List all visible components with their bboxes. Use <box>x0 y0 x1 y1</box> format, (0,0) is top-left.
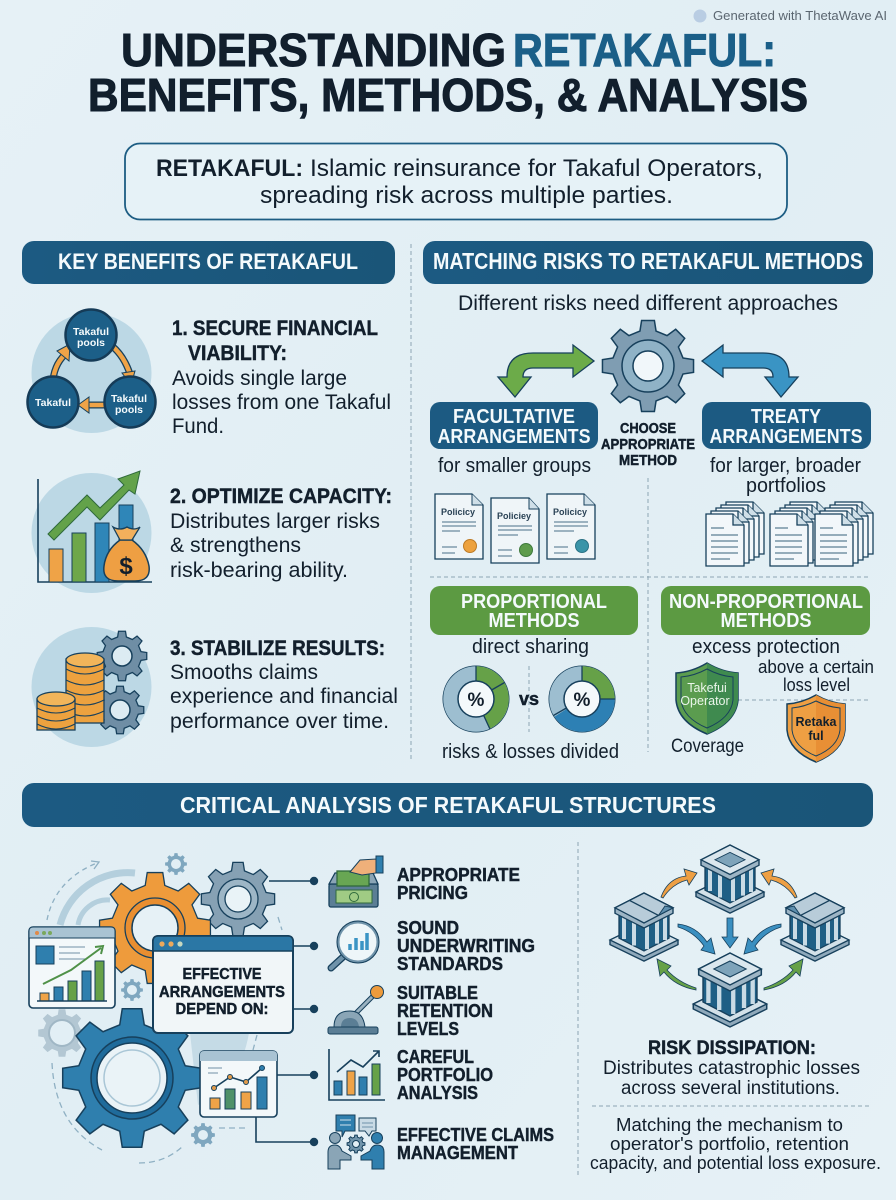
icon: gray gear <box>201 862 275 936</box>
icon: takaful operator shield: Operator <box>680 694 730 708</box>
heading: critical analysis <box>22 783 873 827</box>
label: choose method: CHOOSE <box>620 421 676 437</box>
illustration: gears and dashboards <box>29 853 318 1163</box>
chart: donut one <box>442 666 510 732</box>
arrow: to treaty <box>702 345 798 397</box>
title: UNDERSTANDING <box>121 24 506 76</box>
icon: growth chart with money bag <box>32 471 152 593</box>
connectors <box>256 877 318 1146</box>
icon: takaful pools cycle: Takaful <box>73 326 109 338</box>
text: risk dissipation <box>603 1038 860 1099</box>
text: appropriate pricing: PRICING <box>397 883 468 903</box>
pill: treaty: TREATY <box>751 406 822 428</box>
icon: takaful pools cycle: pools <box>115 404 143 416</box>
text: benefit 1: VIABILITY: <box>188 342 287 365</box>
text: benefit 1: Fund. <box>172 415 224 438</box>
pill: proportional: PROPORTIONAL <box>461 591 607 613</box>
text: treaty note: for larger, broader <box>710 455 861 477</box>
text: careful portfolio analysis: PORTFOLIO <box>397 1065 493 1085</box>
text: coverage: Coverage <box>671 736 744 757</box>
pill: facultative <box>430 402 598 449</box>
text: benefit 2 <box>170 485 392 582</box>
text: matching the mechanism: Matching the mechanism to <box>616 1115 843 1135</box>
icon: retakaful shield: ful <box>808 729 824 743</box>
text: facultative note: for smaller groups <box>438 455 591 477</box>
text: above a certain loss level <box>758 656 874 695</box>
window: effective arrangements: EFFECTIVE <box>182 966 262 983</box>
icon: takaful pools cycle <box>28 310 156 433</box>
text: sound underwriting standards: UNDERWRITING <box>397 936 535 956</box>
title: RETAKAFUL: <box>513 24 776 76</box>
text: appropriate pricing: APPROPRIATE <box>397 865 520 885</box>
heading: matching risks <box>423 241 873 284</box>
text: benefit 3: performance over time. <box>170 710 389 733</box>
label: choose method: APPROPRIATE <box>601 437 695 453</box>
text: risks and losses divided: risks & losses divided <box>442 741 619 763</box>
text: suitable retention levels: SUITABLE <box>397 983 478 1003</box>
text: risk dissipation: Distributes catastrophic losses <box>603 1058 860 1079</box>
title <box>88 24 808 121</box>
diagram: risk dissipation network <box>610 845 849 1027</box>
text: benefit 2: risk-bearing ability. <box>170 559 348 582</box>
icon: retakaful shield <box>787 695 845 762</box>
text: sound underwriting standards: STANDARDS <box>397 954 503 974</box>
arrows: orange <box>661 869 797 898</box>
arrows: blue <box>678 918 781 954</box>
text: excess protection: excess protection <box>692 636 840 658</box>
pill: non-proportional: NON-PROPORTIONAL <box>669 591 863 613</box>
pill: non-proportional: METHODS <box>720 610 812 632</box>
text: suitable retention levels: RETENTION <box>397 1001 493 1021</box>
icon: selection gear <box>602 320 694 412</box>
icon: large blue gear <box>63 1009 201 1147</box>
icon: policy documents: Policicy <box>553 507 587 517</box>
callout: definition: Islamic reinsurance for Takaful Operators, <box>310 155 763 182</box>
chart: donut two <box>548 666 616 732</box>
icon: claims team <box>328 1115 384 1169</box>
text: benefit 1: 1. SECURE FINANCIAL <box>172 317 378 340</box>
text: benefit 3: experience and financial <box>170 685 398 708</box>
icon: portfolio chart <box>329 1049 385 1100</box>
text: benefit 3: Smooths claims <box>170 661 318 684</box>
text: risk dissipation: RISK DISSIPATION: <box>648 1038 816 1059</box>
text: effective claims management: EFFECTIVE CLAIMS <box>397 1125 554 1145</box>
text: suitable retention levels <box>397 983 493 1039</box>
text: treaty note: portfolios <box>746 475 826 497</box>
pill: proportional <box>430 586 638 635</box>
callout: definition: spreading risk across multiple parties. <box>260 182 673 209</box>
text: effective claims management <box>397 1125 554 1163</box>
text: sound underwriting standards <box>397 918 535 974</box>
text: benefit 2: & strengthens <box>170 534 301 557</box>
window: effective arrangements: ARRANGEMENTS <box>159 984 285 1001</box>
arrow: to facultative <box>498 345 594 397</box>
text: benefit 2: Distributes larger risks <box>170 510 380 533</box>
icon: magnifier <box>331 921 379 968</box>
title: BENEFITS, METHODS, & ANALYSIS <box>88 69 808 121</box>
text: above a certain loss level: above a certain <box>758 656 874 677</box>
text: subtitle: Different risks need different approaches <box>458 291 838 315</box>
icon: takaful operator shield <box>676 663 738 734</box>
pill: non-proportional <box>661 586 870 635</box>
pill: facultative: ARRANGEMENTS <box>438 426 590 448</box>
text: benefit 2: 2. OPTIMIZE CAPACITY: <box>170 485 392 508</box>
pill: treaty: ARRANGEMENTS <box>710 426 862 448</box>
icon: institutions <box>610 845 849 1027</box>
watermark: Generated with ThetaWave AI <box>713 9 887 23</box>
icon: takaful pools cycle: pools <box>77 337 105 349</box>
window: effective arrangements <box>153 936 293 1033</box>
window: left chart <box>29 927 115 1008</box>
text: above a certain loss level: loss level <box>783 674 850 695</box>
text: benefit 1 <box>172 317 391 438</box>
text: matching the mechanism <box>590 1115 881 1173</box>
text: benefit 3 <box>170 637 398 733</box>
chart: donut one: % <box>468 690 485 711</box>
pill: treaty <box>702 402 871 449</box>
text: matching the mechanism: capacity, and potential loss exposure. <box>590 1153 881 1173</box>
panel: key benefits <box>28 310 398 747</box>
text: direct sharing: direct sharing <box>472 636 589 658</box>
heading: key benefits <box>22 241 395 284</box>
icon: policy documents <box>435 494 595 563</box>
icon: growth chart with money bag: $ <box>119 553 133 580</box>
icon: policy documents: Policiey <box>497 511 531 521</box>
heading: critical analysis: CRITICAL ANALYSIS OF RETAKAFUL STRUCTURES <box>180 792 716 818</box>
text: treaty note <box>710 455 861 497</box>
text: sound underwriting standards: SOUND <box>397 918 459 938</box>
icon: takaful pools cycle: Takaful <box>111 393 147 405</box>
icon: coins and gears <box>32 627 152 747</box>
icon: takaful pools cycle: Takaful <box>35 397 71 409</box>
text: careful portfolio analysis <box>397 1047 493 1103</box>
icon: small gears <box>38 853 215 1147</box>
text: benefit 1: losses from one Takaful <box>172 391 391 414</box>
text: benefit 3: 3. STABILIZE RESULTS: <box>170 637 385 660</box>
arrows: green <box>657 959 803 990</box>
icon: orange gear <box>100 873 210 983</box>
callout: definition: RETAKAFUL: <box>156 155 303 182</box>
heading: key benefits: KEY BENEFITS OF RETAKAFUL <box>58 249 358 274</box>
text: effective claims management: MANAGEMENT <box>397 1143 518 1163</box>
pill: facultative: FACULTATIVE <box>453 406 575 428</box>
text: matching the mechanism: operator's portfolio, retention <box>610 1134 849 1154</box>
text: suitable retention levels: LEVELS <box>397 1019 459 1039</box>
text: appropriate pricing <box>397 865 520 903</box>
label: choose method <box>601 421 695 469</box>
label: choose method: METHOD <box>619 453 677 469</box>
icon: document stacks <box>706 502 873 566</box>
icon: money pricing <box>329 856 383 907</box>
icon: takaful operator shield: Takefui <box>687 681 727 695</box>
text: careful portfolio analysis: ANALYSIS <box>397 1083 478 1103</box>
window: effective arrangements: DEPEND ON: <box>176 1001 268 1018</box>
label: vs: vs <box>519 689 539 709</box>
window: small chart <box>200 1051 277 1117</box>
text: risk dissipation: across several institutions. <box>621 1078 840 1099</box>
icon: retakaful shield: Retaka <box>796 715 838 729</box>
text: benefit 1: Avoids single large <box>172 367 347 390</box>
icon: policy documents: Policicy <box>441 507 475 517</box>
text: careful portfolio analysis: CAREFUL <box>397 1047 474 1067</box>
chart: donut two: % <box>574 690 591 711</box>
icon: lever <box>328 986 384 1034</box>
pill: proportional: METHODS <box>488 610 580 632</box>
callout: definition <box>125 144 787 220</box>
panel: matching risks <box>430 291 874 763</box>
